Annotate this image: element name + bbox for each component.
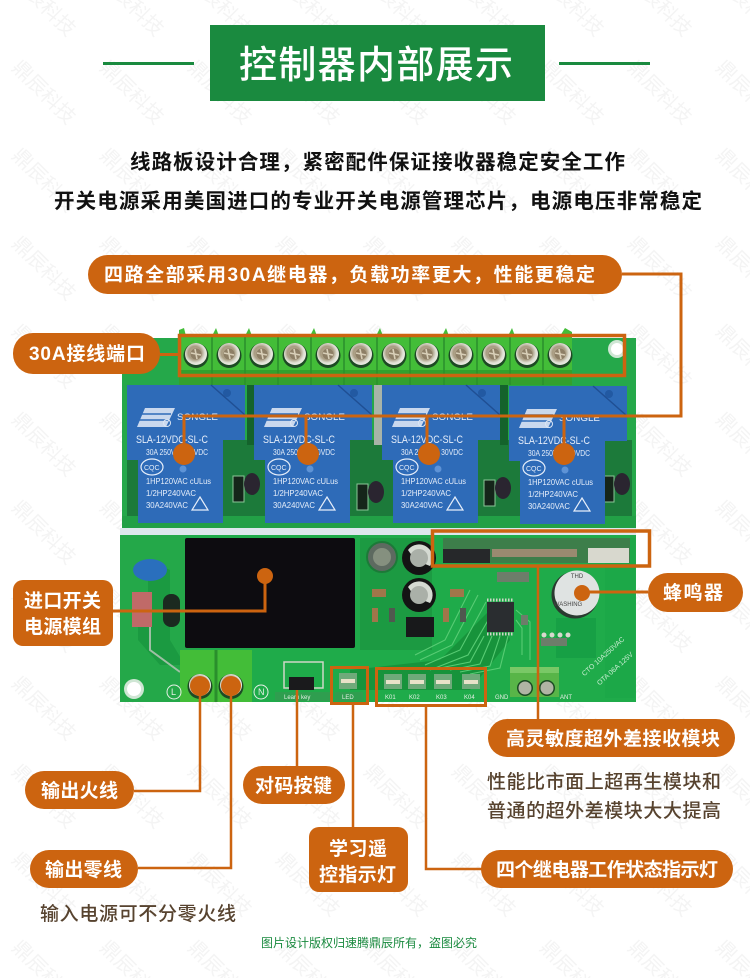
label: relay indicators bbox=[426, 706, 733, 888]
bottom power terminals: L bbox=[171, 687, 176, 697]
K LEDs highlight box bbox=[376, 668, 486, 706]
relay 2: 1HP120VAC cULus bbox=[273, 477, 338, 486]
label: live output bbox=[25, 676, 210, 809]
relay 1: 30A 250VAC 30VDC bbox=[146, 448, 208, 457]
input note: 输入电源可不分零火线 bbox=[40, 903, 236, 925]
relay 1: SONGLE bbox=[177, 412, 218, 422]
intro text bbox=[54, 150, 702, 213]
silkscreen markings: CTO 10A250VAC bbox=[581, 636, 626, 678]
buzzer: WASHING bbox=[554, 602, 583, 608]
antenna terminal: GND bbox=[495, 695, 509, 701]
title bbox=[103, 25, 650, 101]
label: relay indicators: 四个继电器工作状态指示灯 bbox=[496, 858, 718, 881]
status LEDs: K04 bbox=[464, 695, 475, 701]
relay 3: 1HP120VAC cULus bbox=[401, 477, 466, 486]
silkscreen markings: OTA 06A 125V bbox=[596, 651, 635, 687]
relay 2: CQC bbox=[271, 465, 287, 472]
relay marker dots bbox=[173, 443, 575, 465]
relay 4: 30A 250VAC 30VDC bbox=[528, 449, 590, 458]
board gap bbox=[120, 528, 636, 535]
relay 2: 30A240VAC bbox=[273, 501, 315, 510]
electrolytic capacitors bbox=[367, 541, 436, 612]
receiver highlight box bbox=[432, 531, 650, 566]
relay 4: CQC bbox=[526, 466, 542, 473]
label: buzzer: 蜂鸣器 bbox=[663, 582, 723, 604]
relay 4: SONGLE bbox=[559, 413, 600, 423]
circuit board photo bbox=[120, 328, 638, 702]
buzzer: THD bbox=[571, 574, 584, 580]
label: power module: 进口开关 bbox=[24, 590, 101, 612]
relay connector lines bbox=[184, 274, 681, 456]
label: receiver module: 高灵敏度超外差接收模块 bbox=[506, 727, 720, 750]
label: pairing key: 对码按键 bbox=[255, 774, 332, 797]
title: 控制器内部展示 bbox=[239, 45, 513, 87]
copyright footer: 图片设计版权归速腾鼎辰所有，盗图必究 bbox=[261, 935, 477, 950]
relay 2: 1/2HP240VAC bbox=[273, 489, 323, 498]
relay 3: 30A240VAC bbox=[401, 501, 443, 510]
status LEDs bbox=[335, 673, 480, 701]
learn key bbox=[275, 662, 333, 701]
label: terminal port bbox=[13, 333, 179, 374]
relay 4: SLA-12VDC-SL-C bbox=[518, 435, 590, 447]
relay 3: 30A 250VAC 30VDC bbox=[401, 448, 463, 457]
relay 2 bbox=[254, 385, 372, 523]
label: relays: 四路全部采用30A继电器，负载功率更大，性能更稳定 bbox=[104, 263, 595, 286]
relay 2: SLA-12VDC-SL-C bbox=[263, 434, 335, 446]
label: live output: 输出火线 bbox=[41, 779, 118, 802]
receiver module bbox=[443, 538, 630, 563]
label: power module bbox=[13, 568, 273, 646]
buzzer bbox=[552, 570, 600, 618]
receiver note bbox=[487, 771, 721, 822]
relay 3: SLA-12VDC-SL-C bbox=[391, 434, 463, 446]
terminal block bbox=[179, 328, 572, 385]
relay 1: 30A240VAC bbox=[146, 501, 188, 510]
label: learn indicator: 学习遥 bbox=[329, 837, 387, 860]
status LEDs: K02 bbox=[409, 695, 420, 701]
capacitor bbox=[133, 559, 167, 581]
label: pairing key bbox=[243, 690, 345, 804]
relay 3: 1/2HP240VAC bbox=[401, 489, 451, 498]
LED highlight box bbox=[332, 668, 368, 704]
receiver note: 普通的超外差模块大大提高 bbox=[487, 800, 721, 822]
relay 1: 1/2HP240VAC bbox=[146, 489, 196, 498]
SMD parts bbox=[372, 572, 570, 646]
label: terminal port: 30A接线端口 bbox=[29, 343, 145, 365]
label: relays bbox=[88, 255, 622, 294]
relay 2: 30A 250VAC 30VDC bbox=[273, 448, 335, 457]
relay 1 bbox=[127, 385, 245, 523]
relay 4 bbox=[509, 386, 627, 524]
intro text: 线路板设计合理，紧密配件保证接收器稳定安全工作 bbox=[130, 150, 625, 174]
label: learn indicator: 控指示灯 bbox=[319, 863, 396, 886]
antenna terminal: ANT bbox=[560, 695, 572, 701]
antenna terminal bbox=[495, 667, 572, 701]
relay 1: 1HP120VAC cULus bbox=[146, 477, 211, 486]
fuse and varistor bbox=[132, 592, 180, 627]
bottom power terminals bbox=[167, 650, 268, 702]
relay 4: 1/2HP240VAC bbox=[528, 490, 578, 499]
terminal highlight box bbox=[180, 336, 624, 376]
relay 3: CQC bbox=[399, 465, 415, 472]
relay 1: CQC bbox=[144, 465, 160, 472]
bottom power terminals: N bbox=[258, 687, 264, 697]
power module bbox=[185, 538, 355, 648]
relay 4: 30A240VAC bbox=[528, 502, 570, 511]
label: buzzer bbox=[574, 573, 743, 612]
relay 3: SONGLE bbox=[432, 412, 473, 422]
relay 3 bbox=[382, 385, 500, 523]
status LEDs: K03 bbox=[436, 695, 447, 701]
relay 4: 1HP120VAC cULus bbox=[528, 478, 593, 487]
label: power module: 电源模组 bbox=[24, 616, 101, 638]
label: receiver module bbox=[488, 567, 735, 757]
label: neutral output bbox=[30, 676, 241, 888]
status LEDs: LED bbox=[342, 695, 354, 701]
relay 2: SONGLE bbox=[304, 412, 345, 422]
receiver note: 性能比市面上超再生模块和 bbox=[487, 771, 721, 793]
upper board bbox=[122, 328, 636, 528]
label: neutral output: 输出零线 bbox=[45, 858, 122, 881]
silkscreen markings bbox=[581, 636, 638, 690]
status LEDs: K01 bbox=[385, 695, 396, 701]
lower board bbox=[120, 535, 638, 702]
label: learn indicator bbox=[309, 704, 408, 892]
intro text: 开关电源采用美国进口的专业开关电源管理芯片，电源电压非常稳定 bbox=[54, 189, 702, 213]
relay 1: SLA-12VDC-SL-C bbox=[136, 434, 208, 446]
learn key: Learn key bbox=[284, 695, 310, 701]
